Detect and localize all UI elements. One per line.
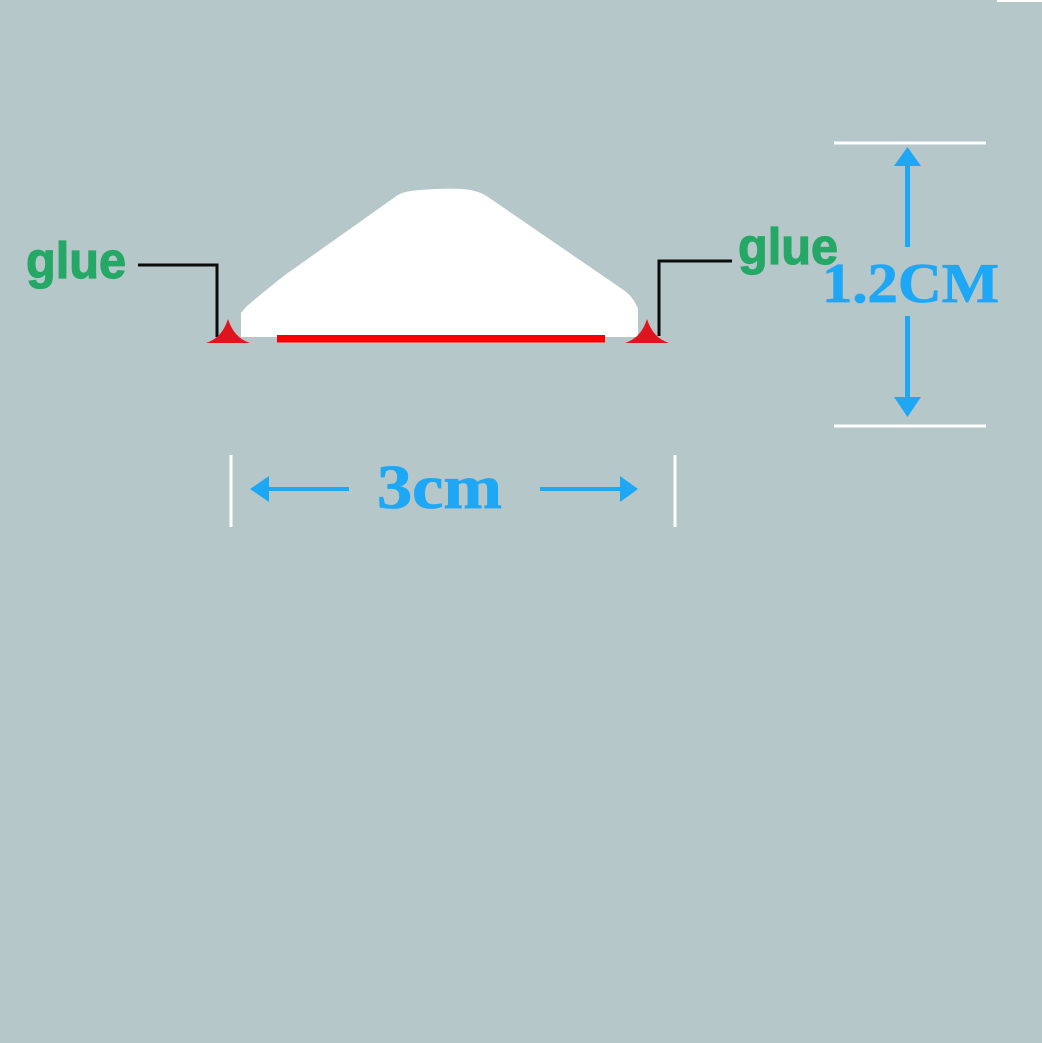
left glue callout	[26, 232, 250, 343]
right glue callout	[625, 218, 838, 343]
strip cross-section	[241, 189, 638, 342]
width label: 3cm	[377, 454, 502, 522]
width limit lines	[231, 455, 675, 527]
width dimension 3cm	[231, 454, 675, 527]
height arrow up	[894, 147, 921, 247]
red adhesive base line	[277, 335, 605, 342]
white trapezoid profile	[241, 189, 638, 337]
height label: 1.2CM	[822, 253, 999, 315]
width arrow right	[540, 476, 638, 502]
left leader line	[138, 265, 217, 337]
left glue label: glue	[26, 232, 126, 289]
width arrow left	[250, 476, 349, 502]
right glue bead	[625, 319, 669, 343]
height arrow down	[894, 316, 921, 417]
left glue bead	[206, 319, 250, 343]
right glue label: glue	[738, 218, 838, 275]
height dimension 1.2CM	[822, 143, 999, 426]
height limit lines	[834, 143, 986, 426]
right leader line	[659, 261, 732, 336]
